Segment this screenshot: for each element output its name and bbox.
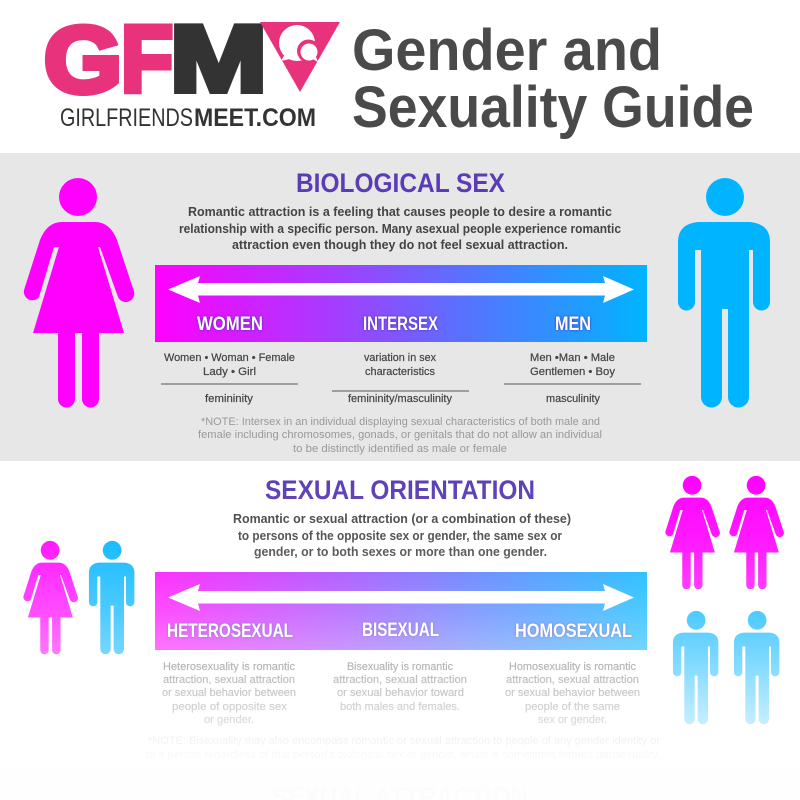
label: homosexual: HOMOSEXUAL [515, 621, 632, 642]
column: intersex terms [332, 352, 469, 405]
label: bisexual: BISEXUAL [362, 620, 439, 641]
note: intersex [198, 416, 602, 455]
column: homosexual description: sex or gender. [538, 714, 607, 726]
note: intersex: female including chromosomes, gonads, or genitals that do not allow an individual [198, 429, 602, 441]
column: homosexual description: or sexual behavior between [505, 687, 640, 699]
column: heterosexual description: or sexual behavior between [162, 687, 296, 699]
note: intersex: to be distinctly identified as male or female [293, 443, 507, 455]
icon: man figure [678, 178, 770, 408]
text block: orientation intro [233, 512, 571, 559]
title: Sexuality Guide [352, 75, 754, 140]
logo: GFM [44, 6, 340, 132]
column: bisexual description: Bisexuality is romantic [347, 661, 453, 673]
column: men terms: Gentlemen • Boy [530, 366, 616, 378]
icon: triangle with chat bubbles [260, 22, 340, 92]
column: intersex terms: variation in sex [364, 352, 436, 364]
column: women terms: femininity [205, 393, 254, 405]
text block: intro [179, 205, 621, 252]
column: homosexual description: attraction, sexual attraction [506, 674, 639, 686]
logo letter F: F [121, 6, 173, 111]
column: women terms: Lady • Girl [203, 366, 256, 378]
logo letter G: G [44, 7, 122, 112]
text block: orientation intro: gender, or to both sexes or more than one gender. [254, 545, 547, 559]
note: bisexuality: to a person regardless of that person's biological sex or gender, which is sometimes termed pansexuality. [146, 749, 660, 761]
text block: intro: relationship with a specific person. Many asexual people experience romantic [179, 222, 621, 236]
gradient bar: orientation spectrum [155, 572, 647, 650]
logo letter M: M [170, 6, 267, 111]
note: bisexuality [146, 735, 660, 761]
logo wordmark: MEET.COM [194, 104, 316, 132]
column: heterosexual description: people of opposite sex [172, 701, 288, 713]
icon: two women [665, 476, 784, 589]
column: intersex terms: femininity/masculinity [348, 393, 452, 405]
column: men terms: masculinity [546, 393, 600, 405]
column: bisexual description: both males and females. [340, 701, 460, 713]
title: Gender and [352, 18, 662, 83]
column: heterosexual description [162, 661, 296, 726]
column: women terms: Women • Woman • Female [164, 352, 295, 364]
heading: biological sex: BIOLOGICAL SEX [296, 168, 505, 198]
heading: sexual orientation: SEXUAL ORIENTATION [265, 475, 535, 505]
column: heterosexual description: attraction, sexual attraction [163, 674, 295, 686]
panel: sexual orientation [23, 475, 784, 761]
text block: orientation intro: to persons of the opposite sex or gender, the same sex or [238, 529, 562, 543]
column: bisexual description: attraction, sexual attraction [333, 674, 467, 686]
note: bisexuality: *NOTE: Bisexuality may also encompass romantic or sexual attraction to people of any gender identity or [148, 735, 660, 747]
text block: intro: Romantic attraction is a feeling that causes people to desire a romantic [188, 205, 612, 219]
text block: orientation intro: Romantic or sexual attraction (or a combination of these) [233, 512, 571, 526]
column: homosexual description: Homosexuality is romantic [509, 661, 636, 673]
gradient bar: sex spectrum [155, 265, 647, 342]
panel: sexual attraction (faded) [0, 770, 800, 800]
column: homosexual description: people of the same [525, 701, 620, 713]
arrow: double headed [168, 276, 634, 303]
icon: woman and man pair [23, 541, 134, 654]
label: intersex: INTERSEX [363, 314, 438, 335]
column: heterosexual description: or gender. [204, 714, 254, 726]
label: heterosexual: HETEROSEXUAL [167, 621, 293, 642]
icon: woman figure [24, 178, 134, 408]
label: men: MEN [555, 314, 591, 335]
column: bisexual description: or sexual behavior toward [337, 687, 464, 699]
column: intersex terms: characteristics [365, 366, 435, 378]
column: bisexual description [333, 661, 467, 713]
text block: intro: attraction even though they do not feel sexual attraction. [232, 238, 568, 252]
arrow: double headed [168, 584, 634, 611]
icon: two men [673, 611, 779, 724]
title [352, 18, 754, 140]
column: homosexual description [505, 661, 640, 726]
label: women: WOMEN [197, 314, 263, 335]
column: men terms: Men •Man • Male [530, 352, 615, 364]
column: heterosexual description: Heterosexuality is romantic [163, 661, 295, 673]
logo wordmark: GIRLFRIENDS [60, 104, 193, 132]
column: women terms [161, 352, 298, 405]
column: men terms [504, 352, 641, 405]
panel: biological sex [0, 153, 800, 461]
note: intersex: *NOTE: Intersex in an individual displaying sexual characteristics of both male and [201, 416, 600, 428]
